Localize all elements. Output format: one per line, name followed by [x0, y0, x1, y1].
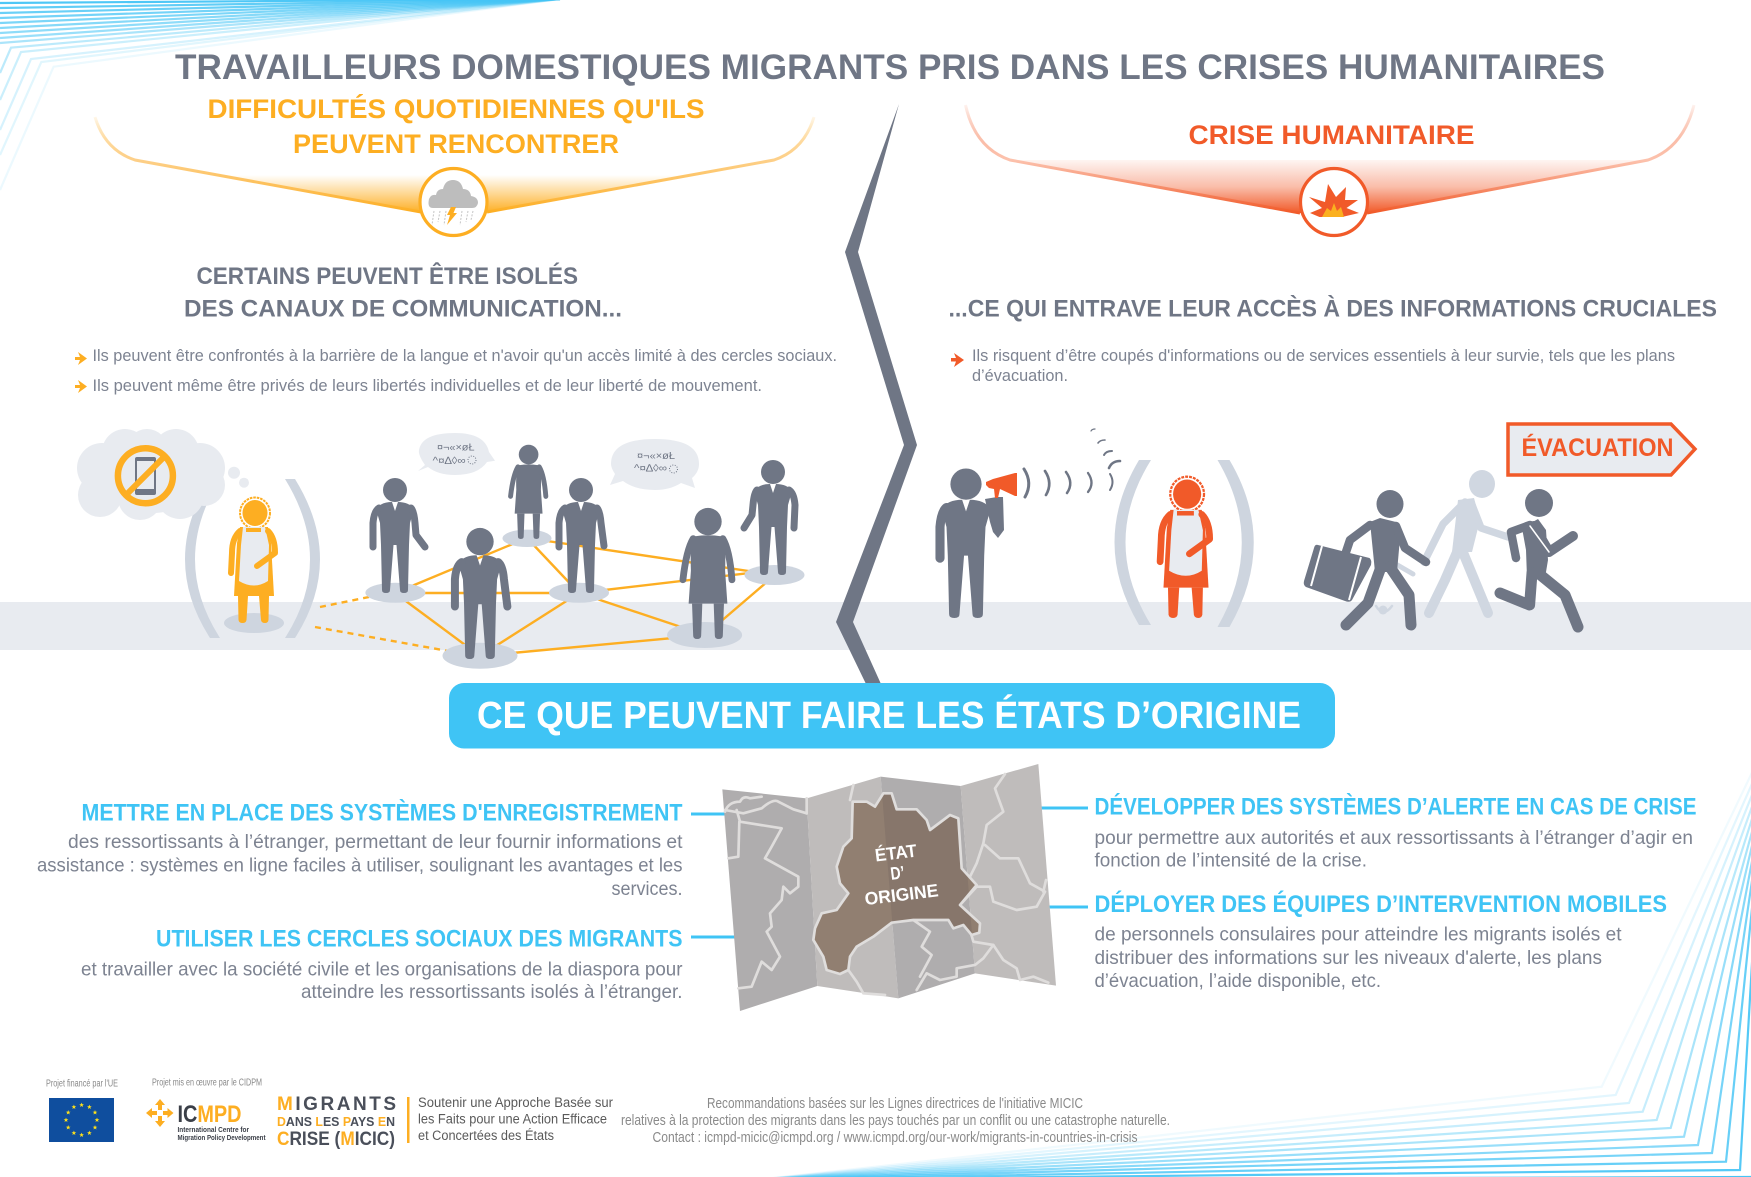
network links: [315, 538, 775, 656]
logo: ICMPD name: Migration Policy Development: [178, 1135, 266, 1142]
text block: systèmes d'alerte: [1094, 792, 1696, 872]
speech bubble 2: [610, 439, 699, 490]
body: [81, 958, 683, 1003]
sign: évacuation: [1508, 424, 1695, 475]
figure: runner front: [1500, 489, 1578, 627]
footer: vertical rule: [407, 1097, 410, 1143]
body: atteindre les ressortissants isolés à l’étranger.: [301, 981, 682, 1003]
footer: MICIC logo: [277, 1094, 396, 1150]
map label: [864, 840, 939, 909]
map: état d'origine: [722, 764, 1056, 1011]
bullets: right: [951, 347, 1675, 385]
figure: woman back: [511, 445, 546, 539]
body: [37, 831, 683, 900]
footer: tagline: les Faits pour une Action Efficace: [418, 1112, 607, 1126]
icon: explosion: [1300, 168, 1368, 236]
heading: METTRE EN PLACE DES SYSTÈMES D'ENREGISTREMENT: [82, 798, 683, 826]
body: assistance : systèmes en ligne faciles à utiliser, soulignant les avantages et les: [37, 854, 683, 876]
illustration: isolated worker and network: [77, 429, 804, 669]
logo: EU flag: [49, 1098, 114, 1142]
body: des ressortissants à l’étranger, permettant de leur fournir informations et: [68, 831, 683, 853]
logo: ICMPD name: [178, 1127, 266, 1142]
map panels: [722, 764, 1056, 1011]
footer: MICIC logo: DANS LES PAYS EN: [277, 1114, 395, 1129]
text block: équipes mobiles: [1094, 890, 1667, 992]
speech bubble 1: ¤¬«×øŁ: [437, 442, 475, 454]
body: [1094, 924, 1622, 992]
footer: tagline: [418, 1095, 613, 1143]
panel header: difficultés quotidiennes: [95, 93, 814, 236]
highlighted state: [813, 793, 980, 974]
arrow bullet: [951, 353, 964, 367]
speech bubble 2: ^¤∆◊∞: [634, 462, 667, 474]
footer: recommendations and contact: [621, 1095, 1170, 1146]
map label: ÉTAT: [874, 840, 918, 866]
subheading: isolés: CERTAINS PEUVENT ÊTRE ISOLÉS: [196, 262, 578, 290]
brackets around worker: [1114, 460, 1254, 627]
heading: difficultés: [208, 93, 704, 159]
logo: ICMPD arrows: [146, 1099, 174, 1127]
funnel: orange: [95, 117, 814, 212]
sign: évacuation: ÉVACUATION: [1522, 433, 1674, 462]
title: TRAVAILLEURS DOMESTIQUES MIGRANTS PRIS DANS LES CRISES HUMANITAIRES: [175, 48, 1605, 87]
arrow bullet 2: [75, 380, 87, 393]
icon: no phone: [118, 448, 173, 503]
bullet text 2: Ils peuvent même être privés de leurs libertés individuelles et de leur liberté de mouvement.: [92, 377, 762, 395]
footer: ICMPD: Projet mis en œuvre par le CIDPM: [152, 1078, 262, 1088]
figure: man 4: [559, 478, 604, 593]
subheading: isolés: DES CANAUX DE COMMUNICATION...: [184, 296, 622, 322]
subheading: informations cruciales: ...CE QUI ENTRAVE LEUR ACCÈS À DES INFORMATIONS CRUCIALES: [948, 294, 1717, 322]
footer: recommendations and contact: Recommandations basées sur les Lignes directrices de l'initiative MICIC: [707, 1095, 1083, 1112]
ground band: [0, 602, 1751, 650]
illustration: crisis and evacuation: [940, 424, 1695, 627]
heading: UTILISER LES CERCLES SOCIAUX DES MIGRANTS: [156, 926, 682, 952]
body: pour permettre aux autorités et aux ressortissants à l’étranger d’agir en: [1094, 827, 1693, 849]
arrow bullet 1: [75, 352, 87, 365]
icon: storm cloud: [420, 168, 487, 236]
figure: man with megaphone: [940, 468, 1004, 618]
heading: difficultés: DIFFICULTÉS QUOTIDIENNES QU'ILS: [208, 93, 704, 124]
footer: MICIC logo: CRISE (MICIC): [277, 1128, 395, 1150]
footer: ICMPD: [146, 1078, 266, 1142]
footer: EU funding: Projet financé par l'UE: [46, 1078, 118, 1090]
footer: EU funding: [46, 1078, 118, 1142]
heading: DÉPLOYER DES ÉQUIPES D’INTERVENTION MOBILES: [1094, 890, 1667, 918]
figure: man right: [744, 460, 795, 575]
text block: cercles sociaux: [81, 926, 683, 1003]
footer: tagline: et Concertées des États: [418, 1128, 554, 1143]
body: de personnels consulaires pour atteindre les migrants isolés et: [1094, 924, 1622, 946]
heading: crise humanitaire: CRISE HUMANITAIRE: [1188, 120, 1474, 150]
body: fonction de l’intensité de la crise.: [1094, 850, 1367, 872]
bases: [224, 530, 804, 669]
footer: tagline: Soutenir une Approche Basée sur: [418, 1095, 613, 1110]
heading: difficultés: PEUVENT RENCONTRER: [293, 129, 619, 159]
body: d’évacuation, l’aide disponible, etc.: [1094, 970, 1381, 992]
speech bubble 1: ^¤∆◊∞: [433, 455, 466, 467]
figure: woman front: [683, 508, 732, 639]
sound waves: [1024, 429, 1120, 497]
decorative line fan: bottom right: [755, 760, 1751, 1177]
footer: recommendations and contact: relatives à la protection des migrants dans les pays touchés par un conflit ou une catastrophe naturelle.: [621, 1112, 1170, 1129]
connector lines: [691, 808, 1088, 937]
figure: worker in crisis: [1160, 477, 1210, 618]
panel header: crise humanitaire: [966, 105, 1694, 236]
logo: ICMPD wordmark: ICMPD: [178, 1101, 242, 1128]
figure: man 1: [373, 478, 425, 593]
logo: ICMPD name: International Centre for: [178, 1127, 249, 1134]
figure: man front: [455, 528, 507, 659]
speech bubble 2: ¤¬«×øŁ: [637, 450, 675, 462]
icon: megaphone: [986, 473, 1017, 498]
speech bubble 1: [418, 433, 495, 475]
zigzag divider: [836, 104, 917, 684]
brackets around worker: [185, 479, 320, 638]
text block: systèmes d'enregistrement: [37, 798, 683, 900]
icon: suitcase: [1304, 545, 1371, 602]
bullet text: d’évacuation.: [972, 367, 1068, 385]
map borders: [725, 774, 1048, 995]
banner: ce que peuvent faire les états d'origine: [449, 683, 1335, 748]
subheading: isolés: [184, 262, 622, 322]
map label: D’: [889, 862, 906, 884]
body: [1094, 827, 1693, 872]
figure: isolated worker: [231, 498, 275, 623]
figure: runner with suitcase: [1346, 490, 1426, 625]
banner: ce que peuvent faire les états d'origine: CE QUE PEUVENT FAIRE LES ÉTATS D’ORIGINE: [477, 693, 1301, 737]
body: services.: [612, 878, 682, 900]
bullet text: [972, 347, 1675, 385]
body: et travailler avec la société civile et les organisations de la diaspora pour: [81, 958, 683, 980]
footer: MICIC logo: MIGRANTS: [277, 1094, 396, 1115]
bullet text 1: Ils peuvent être confrontés à la barrière de la langue et n'avoir qu'un accès limité à des cercles sociaux.: [92, 347, 837, 365]
bullet text: Ils risquent d’être coupés d'informations ou de services essentiels à leur survie, tels que les plans: [972, 347, 1675, 365]
funnel: red: [966, 105, 1694, 213]
body: distribuer des informations sur les niveaux d'alerte, les plans: [1094, 947, 1602, 969]
map label: ORIGINE: [864, 880, 939, 909]
bullets: left: [75, 347, 837, 395]
thought cloud: [77, 429, 249, 520]
footer: recommendations and contact: Contact : icmpd-micic@icmpd.org / www.icmpd.org/our-work/migrants-in-countries-in-crisis: [652, 1129, 1138, 1146]
decorative line fan: top left: [0, 0, 560, 190]
figure: evacuee light: [1376, 470, 1508, 614]
